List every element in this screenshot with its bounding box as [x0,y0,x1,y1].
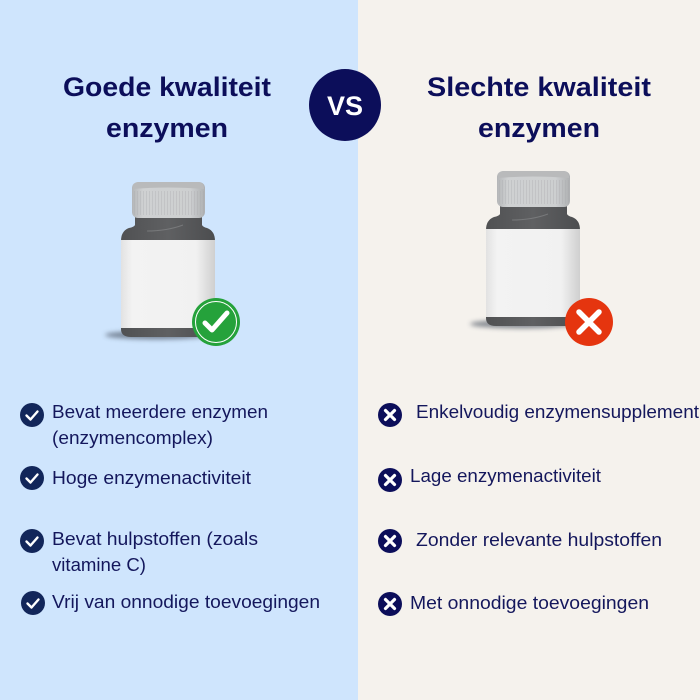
badge: VS: VS [327,91,363,121]
icon: green check badge [192,298,240,346]
list item: low activity: Lage enzymenactiviteit [410,466,601,486]
heading: good quality [63,72,271,143]
list item: no relevant excipients: Zonder relevante hulpstoffen [416,530,662,550]
icon: red cross badge [565,298,613,346]
list item: no relevant excipients [378,529,662,553]
heading: good quality: enzymen [106,113,228,143]
panel: poor quality [358,0,700,700]
list item: single enzyme [378,402,699,427]
list item: unnecessary additives: Met onnodige toevoegingen [410,593,649,613]
panel: good quality [0,0,358,700]
list item: excipients [20,529,258,575]
list item: excipients: vitamine C) [52,555,146,575]
list item: high activity: Hoge enzymenactiviteit [52,468,251,488]
list item: high activity [20,466,251,490]
list item: multiple enzymes: (enzymencomplex) [52,428,213,448]
icon: poor bottle [470,171,580,328]
list item: multiple enzymes: Bevat meerdere enzymen [52,402,268,422]
heading: good quality: Goede kwaliteit [63,72,271,102]
list item: single enzyme: Enkelvoudig enzymensupplement [416,402,699,422]
list item: multiple enzymes [20,402,268,448]
list item: excipients: Bevat hulpstoffen (zoals [52,529,258,549]
list item: low activity [378,466,601,492]
heading: poor quality: Slechte kwaliteit [427,72,651,102]
icon: good bottle [105,182,215,340]
heading: poor quality: enzymen [478,113,600,143]
list item: no additives: Vrij van onnodige toevoegingen [52,592,320,612]
badge: VS [309,69,381,141]
heading: poor quality [427,72,651,143]
list item: unnecessary additives [378,592,649,616]
